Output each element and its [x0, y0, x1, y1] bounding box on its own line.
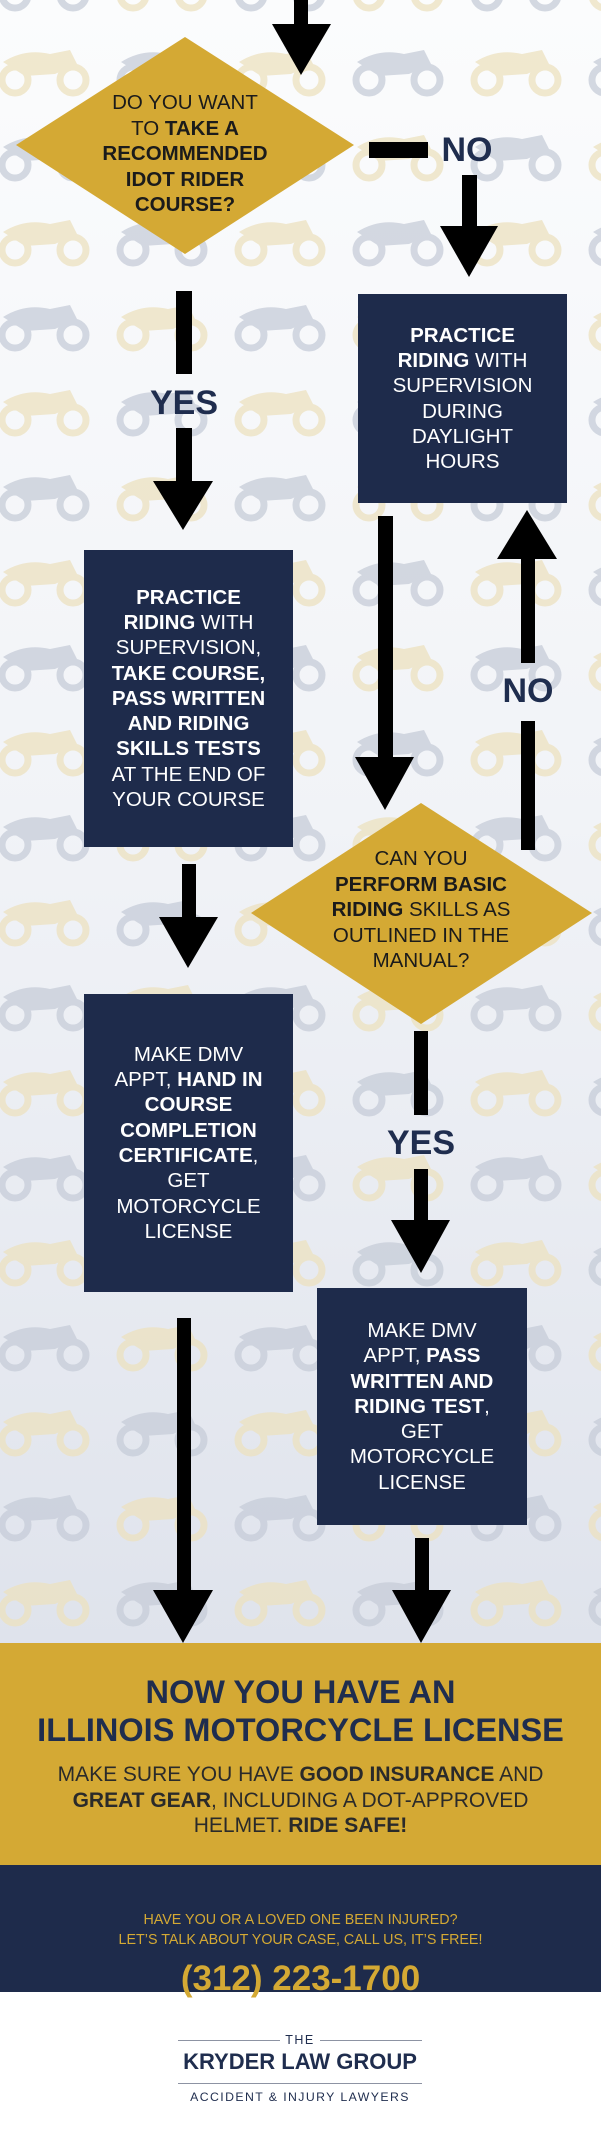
- box: practice with supervision daylight: DAYLIGHT: [412, 425, 513, 448]
- diamond 1 text: IDOT RIDER: [126, 168, 244, 190]
- phone number: (312) 223-1700: [181, 1959, 420, 1998]
- diamond 1 text: DO YOU WANT: [112, 91, 258, 114]
- logo: kryder law group: THE: [285, 2033, 315, 2047]
- diamond 1 text: TO TAKE A: [131, 116, 239, 140]
- text: insurance and gear: HELMET. RIDE SAFE!: [194, 1814, 407, 1837]
- box: practice with supervision daylight: DURING: [422, 400, 503, 422]
- text: insurance and gear: GREAT GEAR, INCLUDING A DOT-APPROVED: [73, 1788, 528, 1812]
- box: practice take course: SKILLS TESTS: [116, 737, 261, 760]
- box: practice take course: TAKE COURSE,: [112, 662, 265, 685]
- box: make dmv appt hand in certificate: COURSE: [145, 1093, 232, 1116]
- box: practice take course: AND RIDING: [128, 712, 249, 735]
- diamond 2 text: PERFORM BASIC: [335, 872, 507, 896]
- box: make dmv appt hand in certificate: MOTORCYCLE: [116, 1195, 261, 1218]
- heading: now you have license: [37, 1674, 564, 1748]
- box: practice take course: RIDING WITH: [124, 611, 253, 634]
- arrow: practice down to diamond 2: [355, 516, 414, 810]
- box: practice take course: SUPERVISION,: [116, 636, 261, 659]
- box: make dmv appt hand in certificate: GET: [167, 1169, 210, 1192]
- box: practice with supervision daylight: RIDING WITH: [398, 349, 527, 372]
- box: practice take course: AT THE END OF: [112, 763, 265, 786]
- box: make dmv appt pass test: MAKE DMV: [367, 1319, 477, 1342]
- box: practice with supervision daylight: PRACTICE: [410, 324, 515, 347]
- box: practice take course: PRACTICE: [136, 586, 241, 609]
- diamond 2 text: OUTLINED IN THE: [333, 924, 509, 946]
- arrow: top entry: [272, 0, 331, 75]
- diamond: take course question: [16, 37, 354, 254]
- arrow: no up part 1: [497, 510, 557, 663]
- diamond 2 text: CAN YOU: [374, 847, 468, 870]
- diamond: basic skills question: [251, 803, 592, 1024]
- arrow: yes down part 2: [153, 428, 213, 530]
- label: YES 2: YES: [387, 1124, 455, 1162]
- box: make dmv appt pass test: APPT, PASS: [364, 1344, 480, 1367]
- box: practice with supervision daylight: SUPERVISION: [393, 374, 532, 397]
- box: make dmv appt hand in certificate: COMPLETION: [120, 1119, 257, 1142]
- box: practice with supervision daylight: HOURS: [425, 450, 500, 473]
- box: practice take course: [84, 550, 293, 847]
- diamond 1 text: [102, 91, 268, 216]
- arrow: yes2 part 2: [391, 1169, 450, 1273]
- diamond 2 text: [332, 847, 510, 972]
- arrow: box3 to license: [153, 1318, 213, 1643]
- text: injured question: HAVE YOU OR A LOVED ONE BEEN INJURED?: [143, 1912, 458, 1928]
- box: make dmv appt hand in certificate: APPT, HAND IN: [114, 1068, 263, 1091]
- box: practice with supervision daylight: [358, 294, 567, 503]
- logo: kryder law group: ACCIDENT & INJURY LAWYERS: [190, 2090, 410, 2104]
- text: injured question: [119, 1912, 482, 1948]
- panel: license result: [0, 1643, 601, 1865]
- heading: now you have license: NOW YOU HAVE AN: [146, 1674, 455, 1710]
- arrow: box2 to box3: [159, 864, 218, 968]
- heading: now you have license: ILLINOIS MOTORCYCLE LICENSE: [37, 1712, 564, 1748]
- flowchart shapes: [16, 0, 592, 1643]
- box: practice take course: YOUR COURSE: [112, 788, 265, 811]
- logo: kryder law group: [178, 2033, 422, 2104]
- box: make dmv appt pass test: WRITTEN AND: [351, 1370, 493, 1393]
- arrow: yes2 part 1: [414, 1031, 428, 1115]
- diamond 2 text: RIDING SKILLS AS: [332, 898, 510, 921]
- box: make dmv appt pass test: LICENSE: [378, 1471, 466, 1494]
- diamond 2 text: MANUAL?: [373, 949, 469, 972]
- box: make dmv appt pass test: [317, 1288, 527, 1525]
- box: make dmv appt hand in certificate: MAKE DMV: [134, 1043, 243, 1066]
- arrow: no up part 2: [521, 721, 535, 850]
- box: make dmv appt hand in certificate: CERTIFICATE,: [119, 1144, 258, 1167]
- arrow: no dash: [369, 142, 428, 158]
- text: insurance and gear: [58, 1763, 543, 1837]
- arrow: no down to practice: [440, 175, 498, 277]
- arrow: box4 to license: [392, 1538, 451, 1643]
- panel: call to action: [0, 1865, 601, 1992]
- diamond 1 text: RECOMMENDED: [102, 142, 268, 165]
- box: make dmv appt pass test: GET: [401, 1420, 443, 1443]
- box: practice take course: PASS WRITTEN: [112, 687, 265, 710]
- diamond 1 text: COURSE?: [135, 193, 235, 216]
- box: make dmv appt hand in certificate: [84, 994, 293, 1292]
- box: make dmv appt hand in certificate: LICENSE: [145, 1220, 232, 1243]
- label: NO (up): NO: [502, 672, 554, 710]
- logo: kryder law group: KRYDER LAW GROUP: [183, 2049, 417, 2074]
- label: NO: NO: [442, 131, 492, 169]
- background pattern: [0, 0, 601, 1643]
- box: make dmv appt pass test: MOTORCYCLE: [350, 1445, 494, 1468]
- box: make dmv appt pass test: RIDING TEST,: [354, 1395, 490, 1418]
- label: YES: YES: [150, 384, 218, 422]
- arrow: yes down part 1: [176, 291, 192, 374]
- text: insurance and gear: MAKE SURE YOU HAVE GOOD INSURANCE AND: [58, 1763, 543, 1786]
- text: injured question: LET’S TALK ABOUT YOUR CASE, CALL US, IT’S FREE!: [119, 1932, 482, 1948]
